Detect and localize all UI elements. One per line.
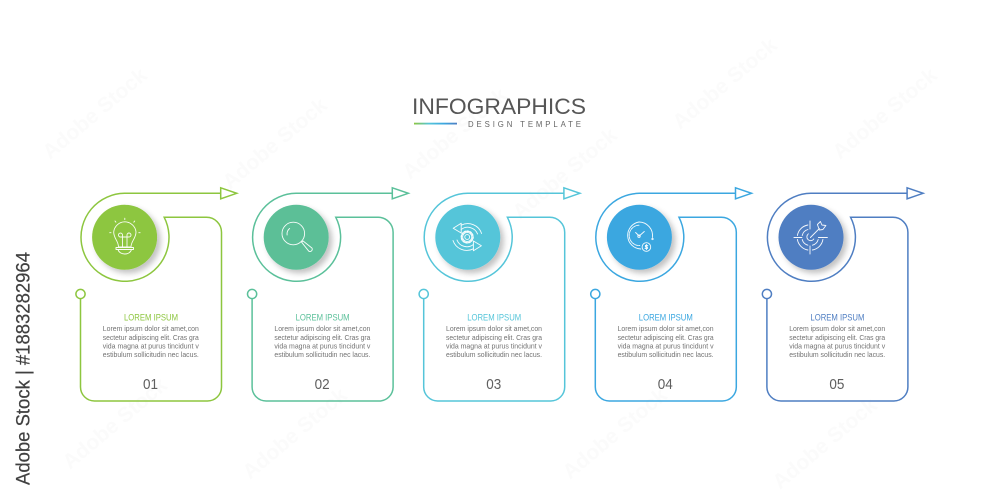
- text block: Lorem ipsum dolor sit amet,con: [103, 324, 199, 333]
- icon: target with arrow: [794, 221, 827, 254]
- circle badge: [607, 205, 672, 270]
- number: 04: [658, 376, 673, 393]
- text block: [789, 324, 886, 359]
- text block: vida magna at purus tincidunt v: [789, 342, 885, 350]
- text: Adobe Stock: [768, 394, 882, 494]
- text block: Lorem ipsum dolor sit amet,con: [618, 324, 714, 333]
- panel: step 02: [248, 188, 408, 401]
- text block: [446, 324, 543, 359]
- text block: Lorem ipsum dolor sit amet,con: [274, 324, 370, 333]
- outline with arrow: [76, 188, 237, 401]
- text: Adobe Stock: [508, 124, 622, 224]
- outline with arrow: [591, 188, 752, 401]
- text: Adobe Stock: [558, 384, 672, 484]
- outline with arrow: [419, 188, 580, 401]
- text block: estibulum sollicitudin nec lacus.: [789, 350, 885, 359]
- text block: sectetur adipiscing elit. Cras gra: [618, 333, 714, 342]
- text block: sectetur adipiscing elit. Cras gra: [274, 333, 371, 342]
- text block: estibulum sollicitudin nec lacus.: [274, 350, 370, 359]
- circle badge: [92, 205, 157, 270]
- outline with arrow: [248, 188, 408, 401]
- panel: step 05: [762, 188, 923, 401]
- text block: [103, 324, 200, 359]
- text: Adobe Stock: [58, 374, 172, 474]
- text block: vida magna at purus tincidunt v: [446, 342, 542, 350]
- watermark id: Adobe Stock | #1883282964: [12, 252, 34, 485]
- text: Adobe Stock: [828, 64, 942, 164]
- title: DESIGN TEMPLATE: [468, 120, 581, 129]
- icon: clock with dollar: [628, 222, 653, 251]
- heading: LOREM IPSUM: [810, 313, 864, 323]
- text: Adobe Stock: [398, 84, 512, 184]
- title: INFOGRAPHICS: [412, 94, 586, 119]
- text block: estibulum sollicitudin nec lacus.: [103, 350, 199, 359]
- circle badge: [264, 205, 329, 270]
- heading: LOREM IPSUM: [639, 313, 693, 323]
- text: Adobe Stock: [218, 94, 332, 194]
- panel: step 03: [419, 188, 580, 401]
- icon: magnifying glass: [282, 222, 312, 252]
- heading: LOREM IPSUM: [124, 313, 178, 323]
- heading: LOREM IPSUM: [467, 313, 521, 323]
- icon: gear with cycle arrows: [453, 223, 482, 251]
- text block: sectetur adipiscing elit. Cras gra: [103, 333, 200, 342]
- panel: step 01: [76, 188, 237, 401]
- text block: estibulum sollicitudin nec lacus.: [446, 350, 542, 359]
- text block: Lorem ipsum dolor sit amet,con: [446, 324, 542, 333]
- panel: step 04: [591, 188, 752, 401]
- number: 01: [143, 376, 158, 393]
- number: 05: [829, 376, 844, 393]
- text: Adobe Stock: [38, 64, 152, 164]
- circle badge: [778, 205, 844, 270]
- text block: estibulum sollicitudin nec lacus.: [618, 350, 714, 359]
- outline with arrow: [762, 188, 923, 401]
- text: Adobe Stock: [238, 384, 352, 484]
- number: 02: [315, 376, 330, 393]
- icon: light bulb: [110, 218, 140, 254]
- text block: vida magna at purus tincidunt v: [618, 342, 714, 350]
- text block: vida magna at purus tincidunt v: [274, 342, 371, 350]
- text block: sectetur adipiscing elit. Cras gra: [789, 333, 886, 342]
- circle badge: [435, 205, 500, 270]
- text: Adobe Stock: [668, 34, 782, 134]
- heading: LOREM IPSUM: [296, 313, 350, 323]
- text block: sectetur adipiscing elit. Cras gra: [446, 333, 543, 342]
- number: 03: [486, 376, 501, 393]
- text block: vida magna at purus tincidunt v: [103, 342, 199, 350]
- text block: Lorem ipsum dolor sit amet,con: [789, 324, 885, 333]
- text block: [274, 324, 371, 359]
- text block: [618, 324, 714, 359]
